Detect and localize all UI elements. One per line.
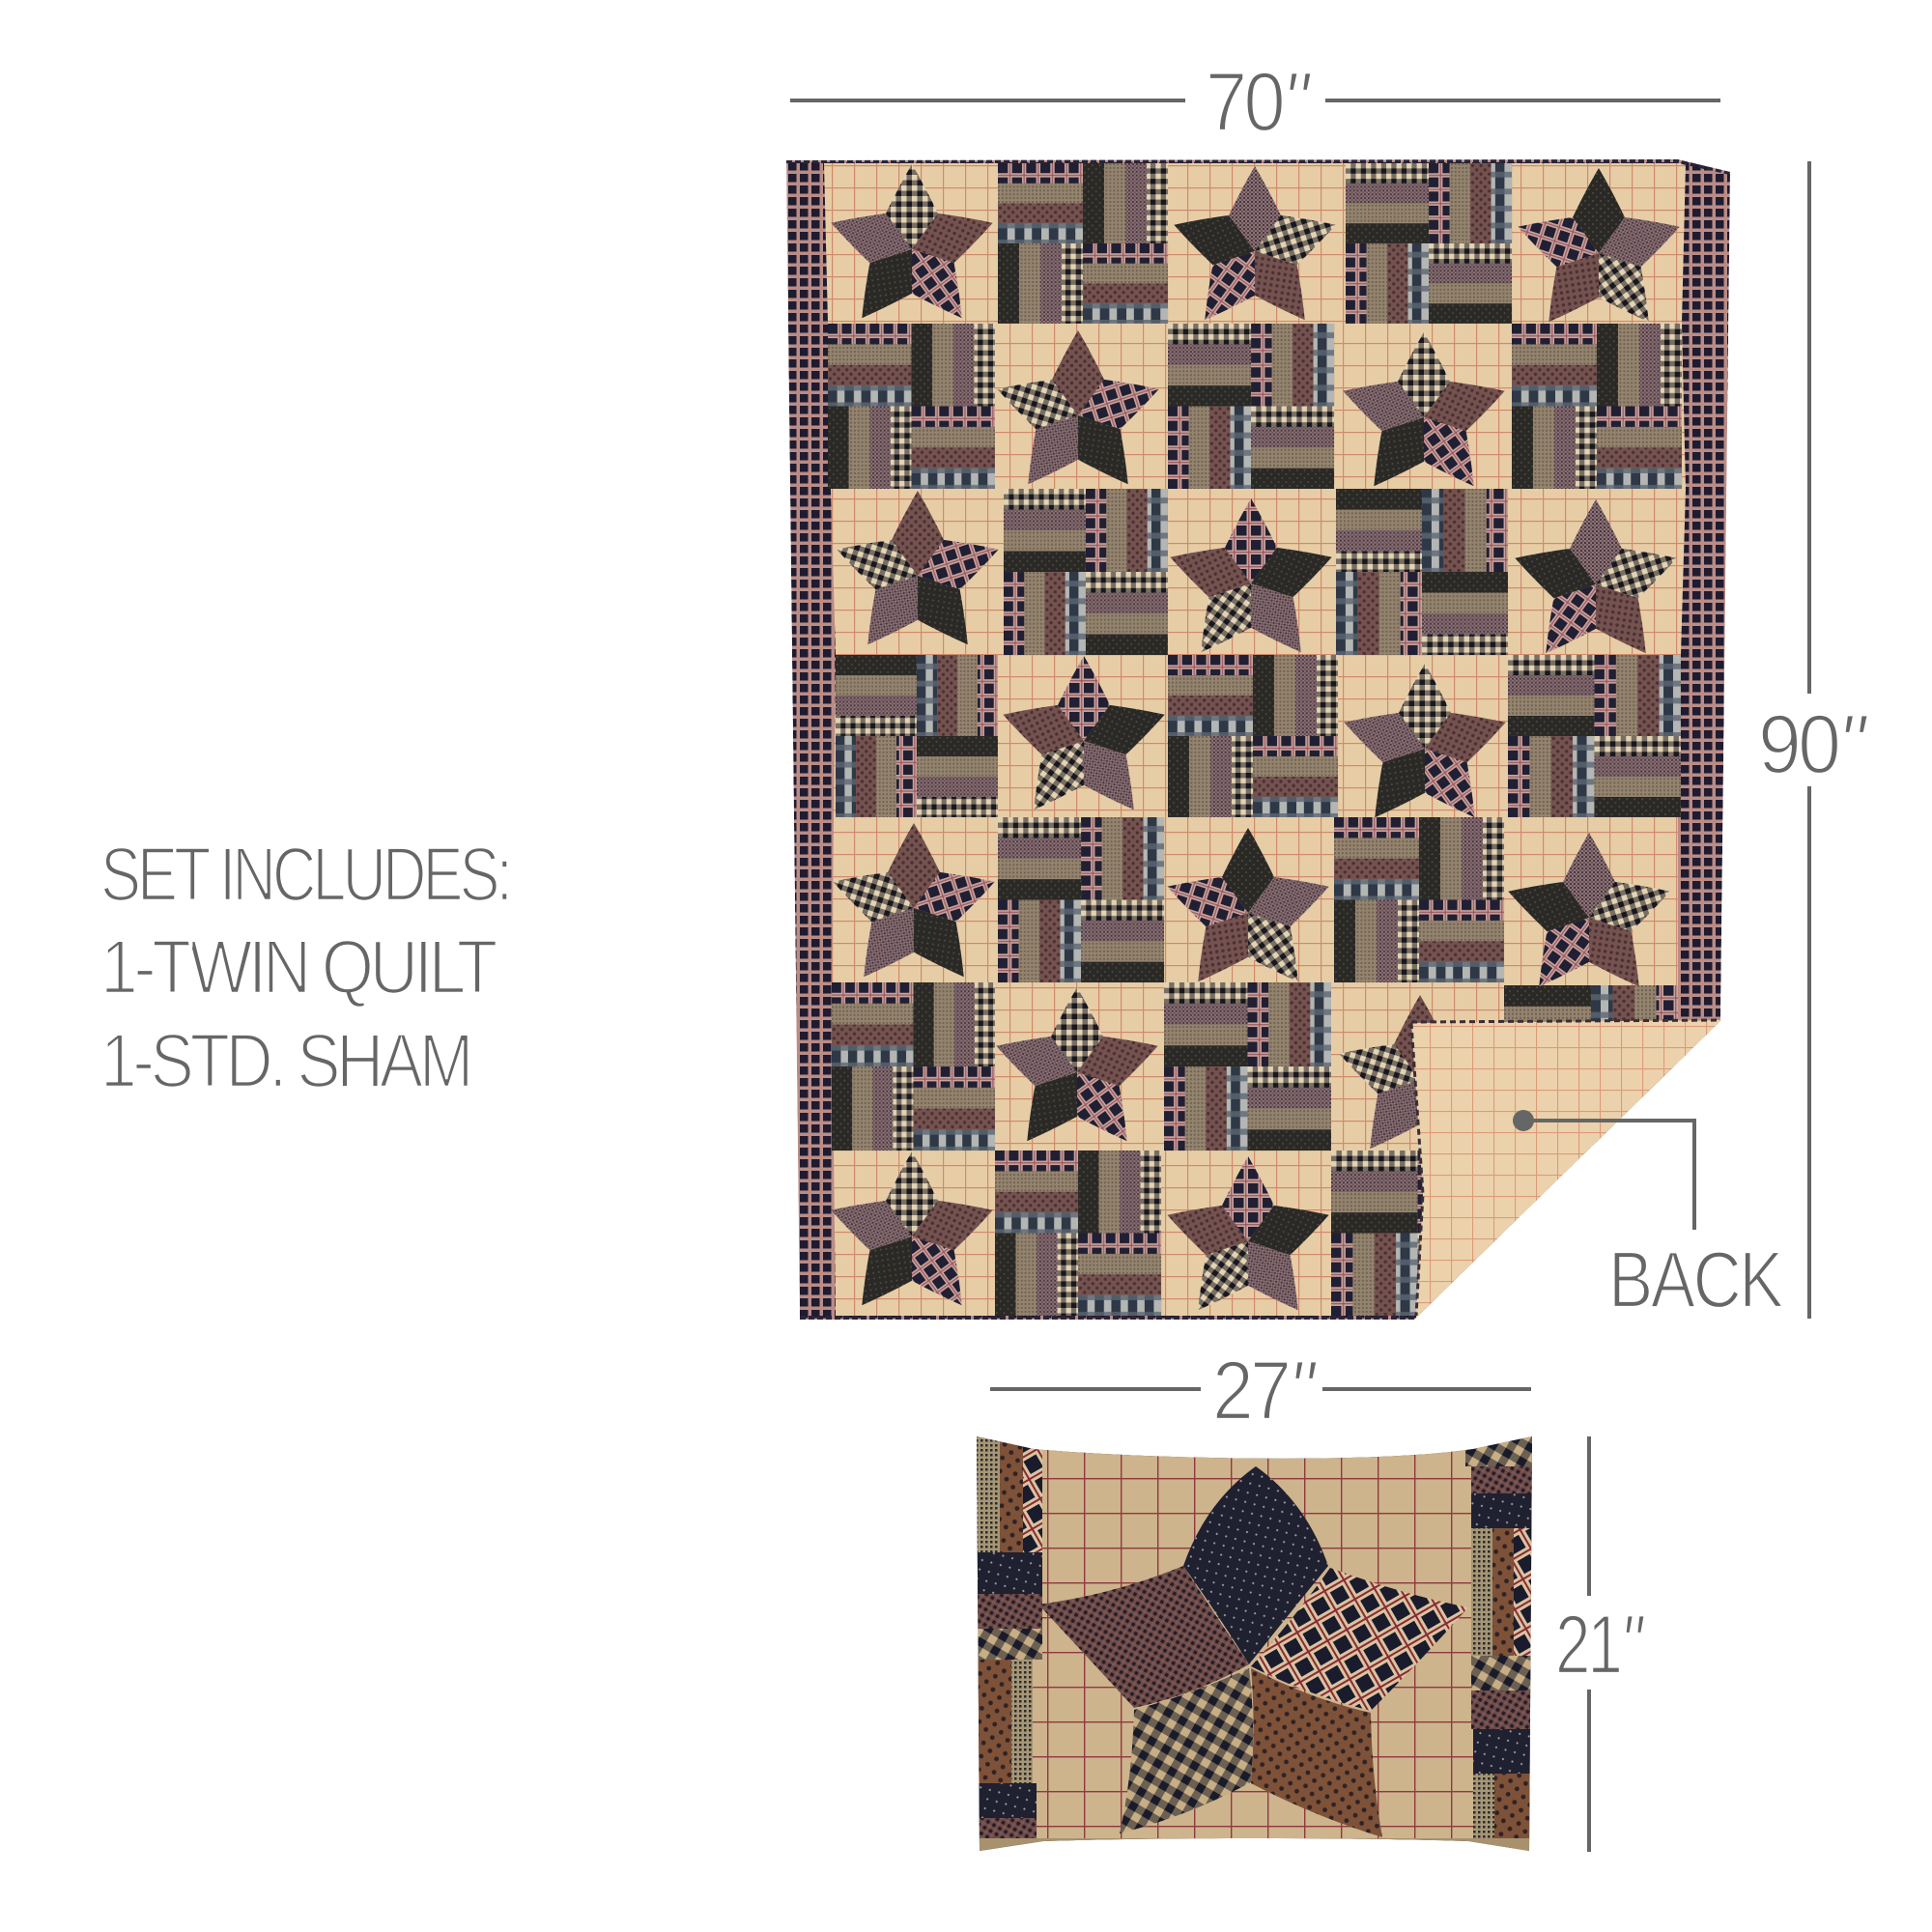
dimension: sham width 27 inches <box>990 1345 1531 1437</box>
folded corner showing quilt back <box>1411 1020 1721 1318</box>
dimension: quilt width 70 inches <box>790 56 1720 149</box>
sham star: top navy petal <box>1183 1466 1328 1664</box>
quilt front and folded back <box>786 132 1730 1362</box>
dimension: quilt length 90 inches <box>1758 161 1868 1319</box>
pillow sham <box>977 1430 1533 1852</box>
sham star: right plaid petal <box>1251 1568 1468 1711</box>
dimension: quilt length 90 inches: 90" <box>1758 698 1868 791</box>
dimension: quilt width 70 inches: 70" <box>1206 56 1312 149</box>
quilt plaid border <box>786 159 1730 1320</box>
text block: set includes <box>100 831 509 1103</box>
sham star: left maroon petal <box>1038 1566 1249 1708</box>
callout: back of quilt: BACK <box>1608 1235 1783 1324</box>
star blocks <box>806 132 1720 1362</box>
sham bottom flange <box>977 1838 1532 1852</box>
dimension: sham height 21 inches <box>1555 1436 1645 1852</box>
fold binding edge <box>1411 1020 1720 1316</box>
sham tan centre <box>1024 1430 1488 1838</box>
sham star: lower-left gingham petal <box>1120 1668 1253 1833</box>
text block: set includes: SET INCLUDES: <box>100 831 509 917</box>
quilt top and bottom binding <box>786 161 1730 1318</box>
sham left strip <box>977 1436 1042 1841</box>
callout: back of quilt <box>1513 1110 1783 1324</box>
text block: set includes: 1-STD. SHAM <box>100 1017 469 1103</box>
sham right strip <box>1465 1436 1533 1841</box>
text block: set includes: 1-TWIN QUILT <box>100 923 497 1009</box>
dimension: sham height 21 inches: 21" <box>1555 1599 1645 1691</box>
sham outer flange shadow <box>977 1436 1532 1851</box>
log cabin blocks <box>828 163 1682 1316</box>
dimension: sham width 27 inches: 27" <box>1212 1345 1318 1437</box>
quilt front patchwork <box>786 132 1730 1362</box>
sham patchwork <box>977 1430 1533 1852</box>
quilt tan field <box>824 163 1686 1316</box>
sham star: lower-right brown petal <box>1251 1668 1382 1837</box>
